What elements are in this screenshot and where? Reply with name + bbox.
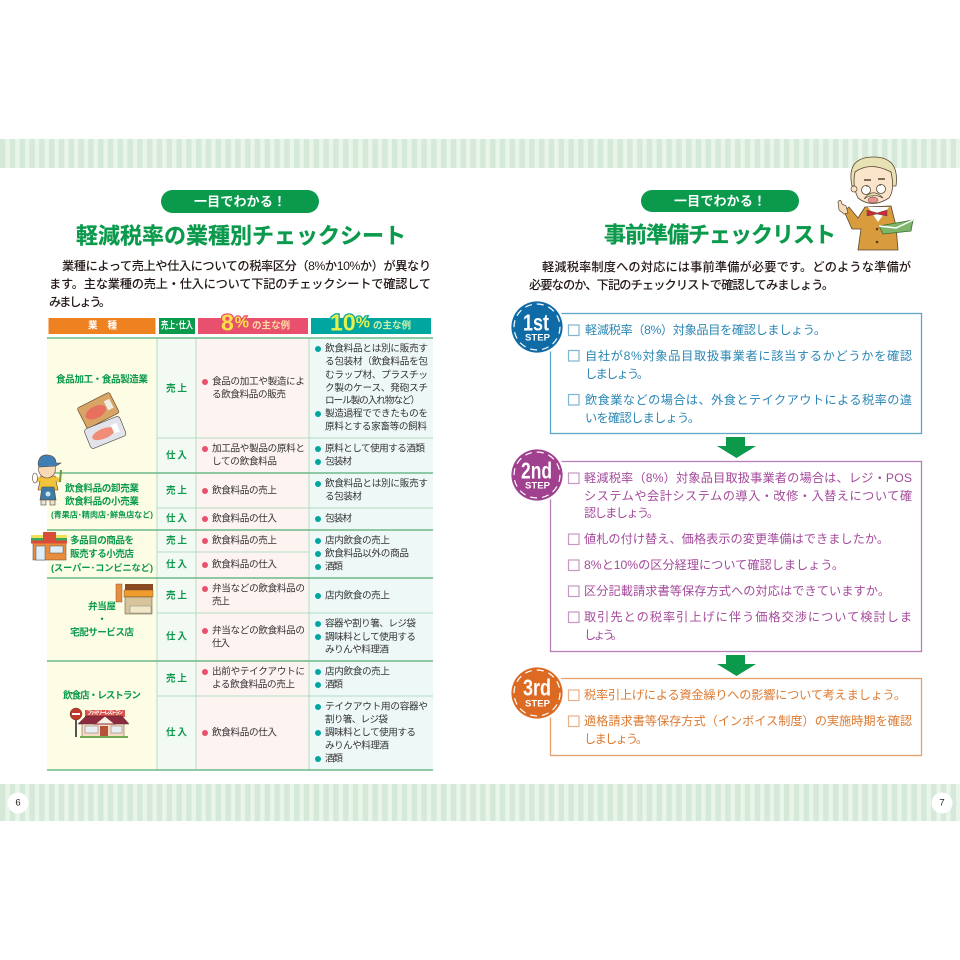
- column: business types: 多品目の商品を: [70, 534, 134, 546]
- intro text left: [49, 258, 431, 309]
- column: sales or purchase: 売 上: [166, 382, 187, 394]
- step 2 badge: STEP: [525, 480, 551, 492]
- column: 8 percent examples: 仕入: [212, 638, 230, 650]
- table header: 8%: [221, 310, 249, 336]
- step 3 checklist: [568, 688, 912, 746]
- column: business types: 弁当屋: [88, 600, 116, 612]
- title left: 軽減税率の業種別チェックシート: [76, 224, 406, 248]
- column: 10 percent examples: る包装材（飲食料品を包: [325, 356, 428, 368]
- step 1 badge: [509, 299, 565, 355]
- column: business types: 飲食店・レストラン: [63, 690, 141, 702]
- page number 6: 6: [15, 798, 21, 808]
- column: 10 percent examples: 酒類: [325, 678, 343, 690]
- column: business types: 飲食料品の小売業: [65, 496, 139, 508]
- heading pill left: [161, 190, 319, 213]
- column: business types: (スーパー･コンビニなど): [51, 562, 153, 573]
- column: business types: (青果店･精肉店･鮮魚店など): [51, 510, 153, 520]
- column: sales or purchase: 売 上: [166, 590, 187, 602]
- title right: 事前準備チェックリスト: [604, 222, 836, 248]
- page number 7: [932, 792, 952, 814]
- column: 10 percent examples: 店内飲食の売上: [325, 666, 390, 678]
- column: 8 percent examples: 弁当などの飲食料品の: [212, 582, 305, 594]
- column: sales or purchase: 仕 入: [166, 558, 187, 570]
- top striped band: [0, 139, 960, 168]
- column: 8 percent examples: しての飲食料品: [212, 456, 277, 468]
- column: 8 percent examples: 飲食料品の仕入: [212, 726, 277, 738]
- column: 10 percent examples: 原料とする家畜等の飼料: [325, 420, 427, 432]
- step 3 box: [509, 665, 922, 756]
- step 3 badge: STEP: [525, 698, 551, 710]
- column: 10 percent examples: 飲食料品以外の商品: [325, 548, 409, 560]
- icon: bento shop: [116, 584, 153, 614]
- table header: 売上･仕入: [161, 320, 193, 332]
- step 1 checklist: しましょう。: [585, 367, 649, 381]
- column: business types: 飲食料品の卸売業: [65, 482, 139, 494]
- intro text left: 業種によって売上や仕入についての税率区分（8%か10%か）が異なり: [62, 258, 431, 273]
- column: 10 percent examples: 調味料として使用する: [325, 726, 416, 738]
- step 2 checklist: 取引先との税率引上げに伴う価格交渉について検討しま: [584, 609, 912, 624]
- page number 6: [8, 792, 28, 814]
- column: 10 percent examples: むラップ材、プラスチッ: [325, 369, 428, 381]
- column: sales or purchase: 仕 入: [166, 630, 187, 642]
- column: sales or purchase: 仕 入: [166, 450, 187, 462]
- step 1 checklist: いを確認しましょう。: [585, 410, 700, 425]
- step 1 checklist: 軽減税率（8%）対象品目を確認しましょう。: [585, 322, 826, 337]
- column: 8 percent examples: 加工品や製品の原料と: [212, 442, 305, 454]
- column: sales or purchase: 仕 入: [166, 512, 187, 524]
- step 1 badge: 1st: [523, 310, 549, 336]
- table header: 業 種: [88, 320, 117, 332]
- column: 10 percent examples: 原料として使用する酒類: [325, 442, 425, 454]
- step 2 checklist: 値札の付け替え、価格表示の変更準備はできましたか。: [584, 531, 889, 546]
- column: 10 percent examples: 包装材: [325, 512, 352, 524]
- column: 10 percent examples: 包装材: [325, 456, 352, 468]
- column: 10 percent examples: みりんや料理酒: [325, 740, 389, 752]
- column: sales or purchase: 売 上: [166, 534, 187, 546]
- arrow: step 1 to step 2: [717, 437, 756, 458]
- step 2 checklist: システムや会計システムの導入・改修・入替えについて確: [584, 488, 912, 503]
- column: 10 percent examples: ク製のケース、発砲スチ: [325, 382, 428, 394]
- step 3 checklist: しましょう。: [584, 732, 648, 746]
- intro text left: みましょう。: [49, 295, 111, 309]
- step 2 checklist: 認しましょう。: [584, 506, 659, 520]
- column: 8 percent examples: よる飲食料品の売上: [212, 678, 295, 690]
- heading pill right: 一目でわかる！: [674, 194, 766, 208]
- column: business types: 食品加工・食品製造業: [56, 374, 148, 386]
- step 2 checklist: しょう。: [584, 628, 623, 642]
- column: 10 percent examples: 飲食料品とは別に販売す: [325, 342, 428, 354]
- arrow: step 2 to step 3: [717, 655, 756, 676]
- step 2 badge: [509, 447, 565, 503]
- column: 8 percent examples: 飲食料品の仕入: [212, 558, 277, 570]
- column: 10 percent examples: 酒類: [325, 752, 343, 764]
- step 2 checklist: 8%と10%の区分経理について確認しましょう。: [584, 557, 844, 572]
- panel: left page business type check sheet: [31, 190, 433, 770]
- table header: の主な例: [252, 320, 290, 332]
- column: 8 percent examples: る飲食料品の販売: [212, 388, 286, 400]
- column: 10 percent examples: る包装材: [325, 490, 362, 502]
- step 3 badge: [509, 665, 565, 721]
- column: 10 percent examples: 調味料として使用する: [325, 631, 416, 643]
- step 2 checklist: 区分記載請求書等保存方式への対応はできていますか。: [584, 583, 890, 598]
- icon: food trays: [77, 392, 127, 449]
- intro text right: 軽減税率制度への対応には事前準備が必要です。どのような準備が: [542, 259, 911, 274]
- column: 8 percent examples: 飲食料品の売上: [212, 534, 277, 546]
- icon: family restaurant: ファミリーレストラン: [87, 710, 123, 716]
- icon: shop worker: [32, 455, 61, 505]
- table header: [48, 310, 431, 336]
- icon: convenience store: [31, 532, 67, 560]
- step 2 checklist: [568, 470, 912, 642]
- column: sales or purchase: 仕 入: [166, 726, 187, 738]
- column: 8 percent examples: 弁当などの飲食料品の: [212, 624, 305, 636]
- intro text left: ます。主な業種の売上・仕入について下記のチェックシートで確認して: [49, 276, 431, 291]
- table header: の主な例: [373, 320, 411, 332]
- heading pill right: [641, 190, 799, 212]
- step 1 badge: STEP: [525, 332, 551, 344]
- table body grid: [47, 338, 433, 770]
- column: 10 percent examples: 製造過程でできたものを: [325, 408, 428, 420]
- column: 10 percent examples: 店内飲食の売上: [325, 590, 390, 602]
- heading pill left: 一目でわかる！: [194, 194, 286, 209]
- step 1 checklist: 飲食業などの場合は、外食とテイクアウトによる税率の違: [585, 392, 912, 407]
- column: 10 percent examples: 酒類: [325, 560, 343, 572]
- step 2 badge: 2nd: [521, 458, 552, 484]
- column: sales or purchase: [166, 382, 187, 738]
- column: 10 percent examples: 店内飲食の売上: [325, 534, 390, 546]
- step 1 checklist: [568, 322, 912, 425]
- column: 10 percent examples: 割り箸、レジ袋: [325, 714, 388, 726]
- column: business types: 販売する小売店: [70, 548, 134, 560]
- column: 10 percent examples: ロール製の入れ物など）: [325, 394, 420, 406]
- intro text right: 必要なのか、下記のチェックリストで確認してみましょう。: [529, 277, 834, 292]
- icon: professor character: [838, 157, 913, 250]
- bottom striped band: [0, 784, 960, 821]
- column: 10 percent examples: テイクアウト用の容器や: [325, 700, 428, 712]
- column: 10 percent examples: みりんや料理酒: [325, 644, 389, 656]
- column: 8 percent examples: 食品の加工や製造によ: [212, 376, 305, 388]
- column: 8 percent examples: 飲食料品の仕入: [212, 512, 277, 524]
- page number 7: 7: [939, 798, 945, 808]
- step 3 badge: 3rd: [523, 674, 551, 700]
- column: business types: ・: [97, 614, 107, 626]
- column: 8 percent examples: 売上: [212, 596, 230, 608]
- step 1 checklist: 自社が8%対象品目取扱事業者に該当するかどうかを確認: [585, 348, 912, 363]
- table header: 10%: [330, 310, 370, 336]
- column: 8 percent examples: [202, 376, 305, 738]
- step 1 box: [509, 299, 922, 434]
- column: sales or purchase: 売 上: [166, 484, 187, 496]
- column: business types: 宅配サービス店: [70, 626, 134, 638]
- panel: right page preparation checklist: [509, 157, 922, 755]
- column: 8 percent examples: 出前やテイクアウトに: [212, 666, 305, 678]
- column: 8 percent examples: 飲食料品の売上: [212, 484, 277, 496]
- column: 10 percent examples: 飲食料品とは別に販売す: [325, 478, 428, 490]
- step 3 checklist: 税率引上げによる資金繰りへの影響について考えましょう。: [584, 688, 906, 702]
- column: sales or purchase: 売 上: [166, 672, 187, 684]
- column: 10 percent examples: 容器や割り箸、レジ袋: [325, 618, 416, 630]
- column: 10 percent examples: [315, 342, 428, 764]
- step 2 checklist: 軽減税率（8%）対象品目取扱事業者の場合は、レジ・POS: [584, 470, 912, 485]
- intro text right: [529, 259, 911, 292]
- column: business types: [51, 374, 153, 702]
- step 2 box: [509, 447, 922, 652]
- icon: family restaurant: [70, 708, 129, 738]
- step 3 checklist: 適格請求書等保存方式（インボイス制度）の実施時期を確認: [584, 713, 912, 728]
